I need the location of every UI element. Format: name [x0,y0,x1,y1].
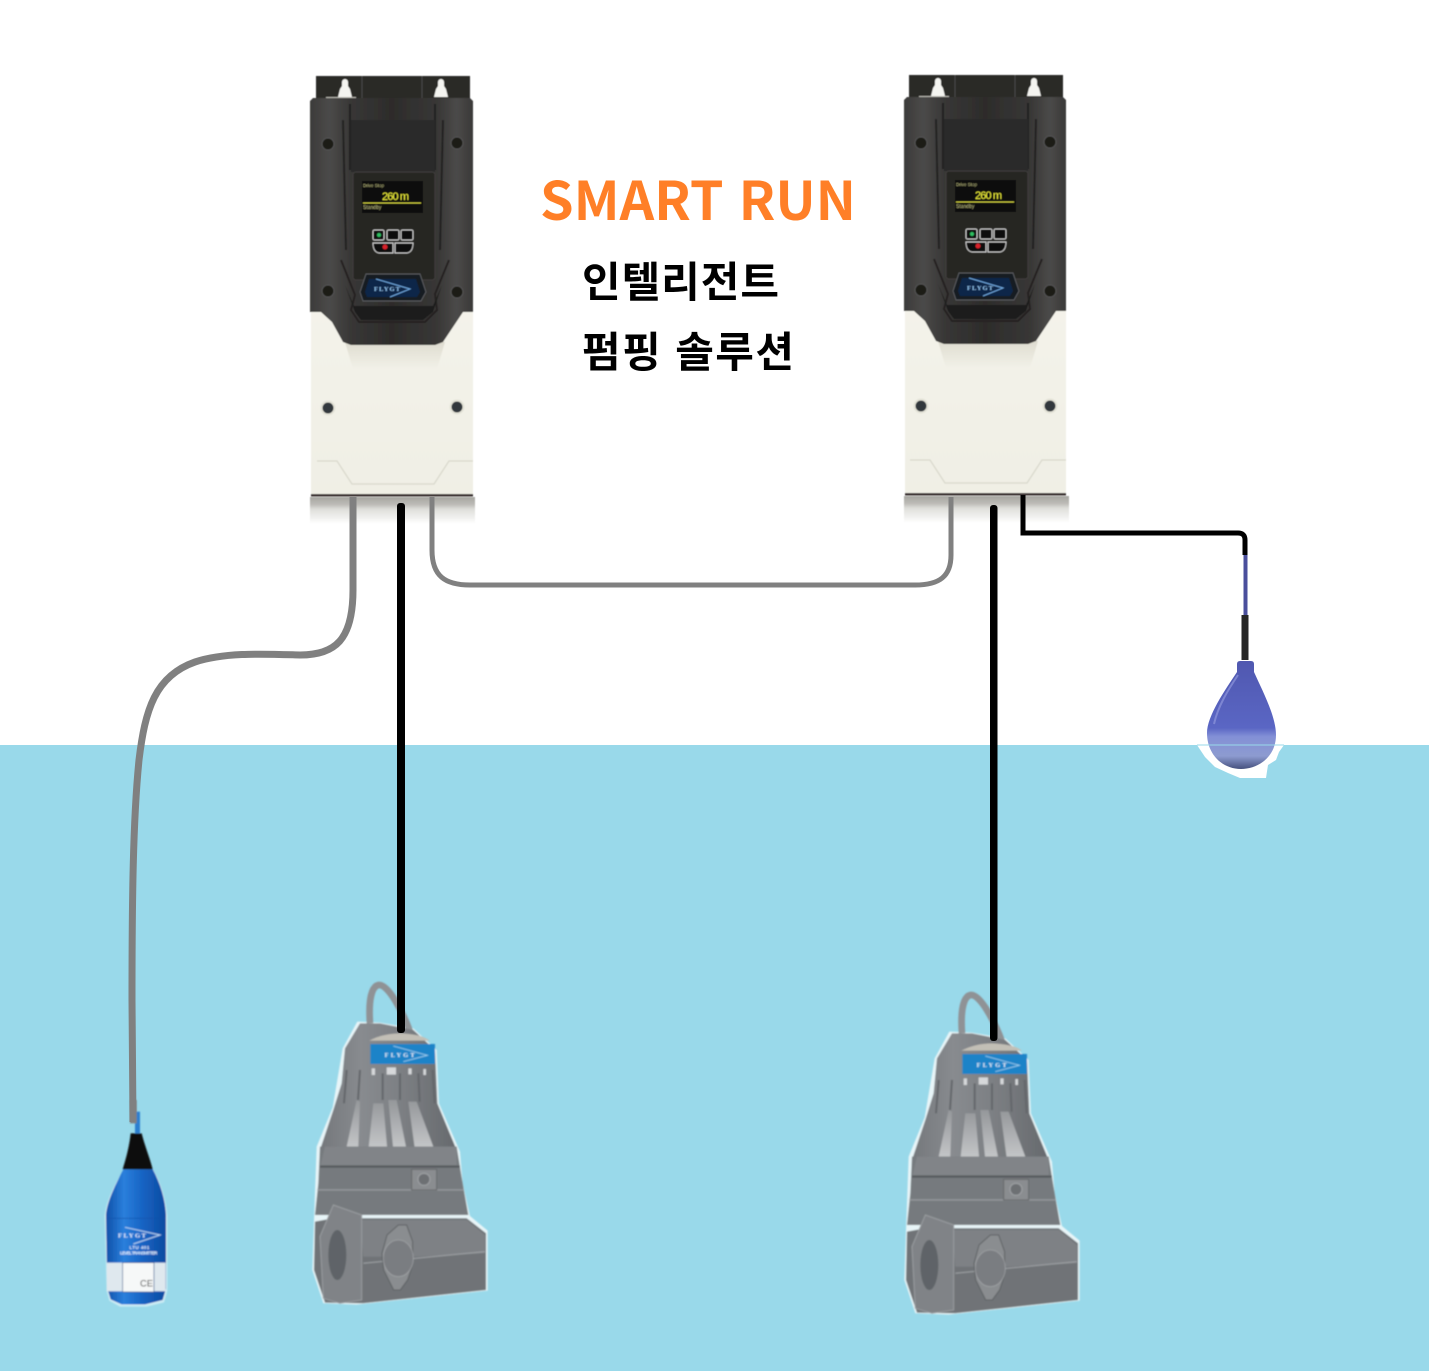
flygt badge: FLYGT [967,285,994,292]
keypad panel [353,172,435,301]
flygt label [370,1044,435,1064]
level transmitter: LEVEL TRANSMITTER [120,1250,158,1255]
black power cable: right pump [990,505,998,1041]
level transmitter: CE [140,1279,153,1289]
middle housing [315,1147,468,1215]
inlet flange [320,1205,362,1303]
mounting bracket [316,76,470,100]
flygt badge: FLYGT [374,286,401,293]
submersible pump: right [904,995,1080,1315]
fins [936,1077,1027,1160]
dark front cover [310,98,473,345]
brand text: FLYGT [118,1232,147,1239]
display screen: 260 m [975,190,1002,202]
display screen [362,181,423,213]
flygt label: FLYGT [385,1052,415,1059]
black cable to float switch [1023,495,1245,555]
level transmitter [105,1100,167,1307]
submersible pump: left [312,985,488,1305]
keypad buttons [966,229,1006,252]
top cap [369,1033,430,1041]
junction block [412,1169,437,1190]
subtitle: line 1: 인텔리전트 [582,259,779,306]
grey sensor cable to level transmitter [132,497,353,1122]
label [107,1263,166,1291]
black cable end over left pump [397,960,405,1033]
drive unit: right [904,75,1069,523]
oval cover [974,1235,1005,1300]
float sleeve [1242,615,1248,660]
fins [344,1067,435,1150]
display screen: Drive Stop [363,183,385,188]
volute [314,1218,486,1303]
inlet flange [912,1215,954,1313]
grey link cable between drives [432,497,951,585]
volute [906,1228,1078,1313]
mounting bracket [909,75,1063,99]
flygt label [962,1054,1027,1074]
black cable end over right pump [990,960,998,1041]
flygt label: FLYGT [977,1062,1007,1069]
white halo [312,1022,488,1305]
level transmitter: LTU 401 [129,1245,150,1250]
display screen: Drive Stop [956,182,978,187]
display screen: 260 m [382,191,409,203]
transmitter bottle [105,1170,167,1307]
cable loop [962,995,1002,1042]
cream lower housing [310,305,475,524]
dark front cover [904,97,1066,344]
middle housing [907,1157,1060,1225]
water halo under float [1197,745,1284,778]
float body [1207,661,1276,769]
display screen: Standby [363,205,382,211]
oval cover [382,1225,413,1290]
display screen: Standby [956,204,975,210]
cream lower housing [904,304,1069,523]
float switch [1197,555,1284,778]
subtitle: line 2: 펌핑 솔루션 [582,329,794,376]
cable loop [370,985,410,1032]
white halo [904,1032,1080,1315]
junction block [1004,1179,1029,1200]
title: smart run: SMART RUN [540,160,856,236]
black power cable: left pump [397,503,405,1033]
display screen [955,180,1016,212]
motor cone [320,1023,457,1150]
motor cone [912,1033,1049,1160]
float cord [1244,555,1248,617]
drive unit: left [310,76,475,524]
black collar [123,1133,153,1169]
top cap [961,1043,1022,1051]
keypad panel [946,171,1028,300]
keypad buttons [373,230,413,253]
water background [0,745,1429,1371]
